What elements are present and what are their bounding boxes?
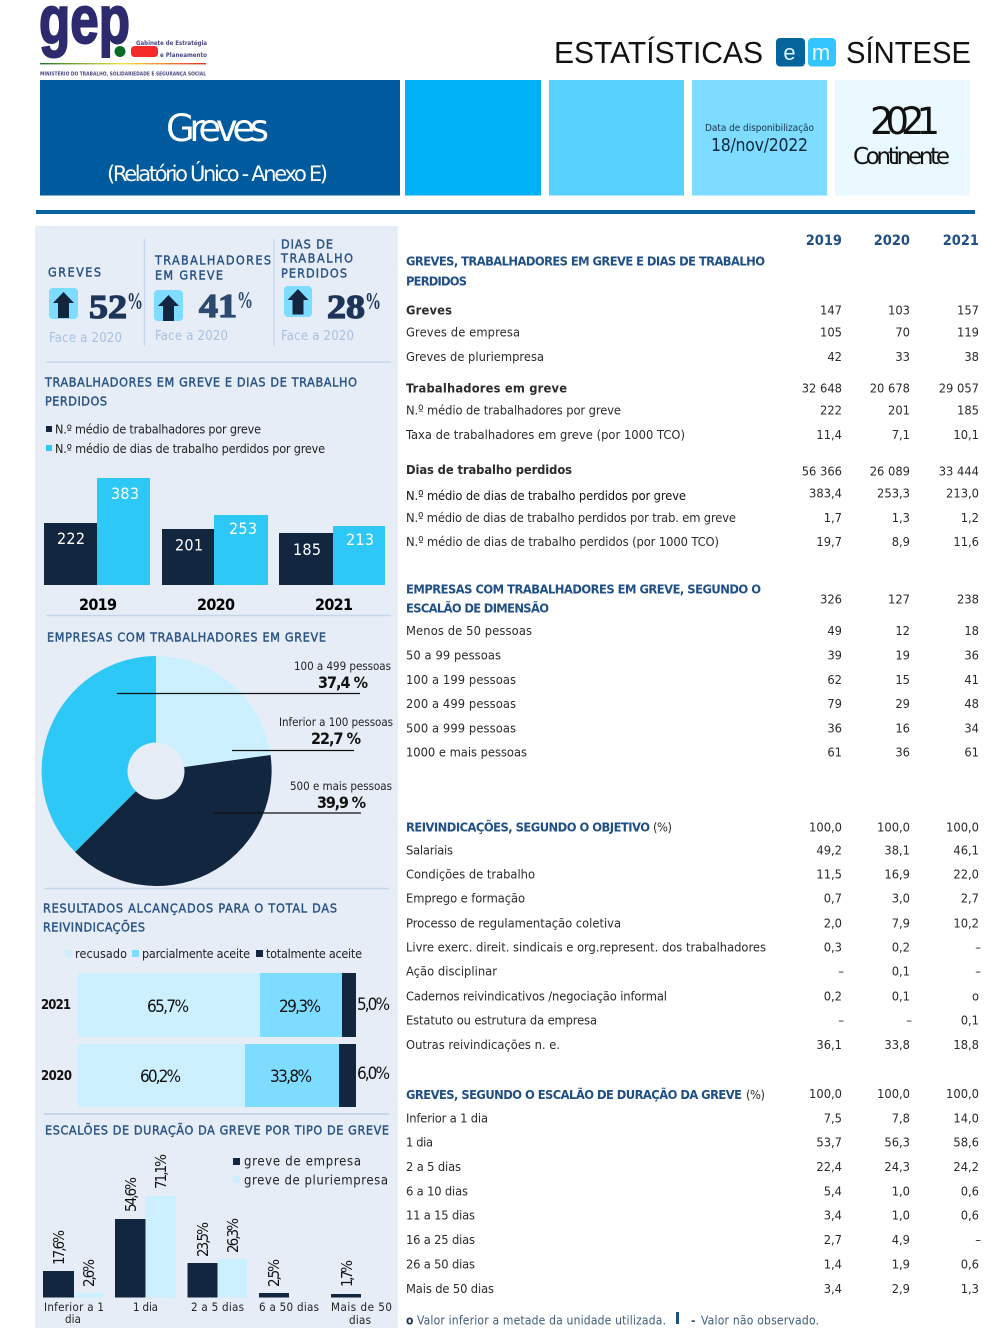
logo: GEP xyxy=(39,0,207,78)
table section: duração da greve: 3,4 xyxy=(824,1208,842,1224)
bar chart: trabalhadores e dias: 201 xyxy=(175,536,203,554)
row: dias de trabalho perdidos: 33 444 xyxy=(939,464,979,480)
table section: duração da greve: 2 a 5 dias xyxy=(406,1160,461,1175)
table section: duração da greve: 2,7 xyxy=(824,1233,842,1248)
publication title: m xyxy=(812,40,830,65)
section heading: GREVES, TRABALHADORES EM GREVE E DIAS DE TRABALHO xyxy=(406,254,765,270)
bar chart: duração por tipo: dia xyxy=(65,1312,81,1326)
table section: greves, trabalhadores e dias: 383,4 xyxy=(809,486,842,502)
table section: greves, trabalhadores e dias: 11,4 xyxy=(816,428,842,443)
table section: reivindicações: 16,9 xyxy=(884,868,910,882)
stacked bar: 2021: 5,0% xyxy=(357,995,390,1015)
bar chart: trabalhadores e dias: 222 xyxy=(57,529,85,548)
table section: greves, trabalhadores e dias: N.º médio de dias de trabalho perdidos (por 1000 TCO) xyxy=(406,535,719,550)
heading: resultados xyxy=(43,900,337,934)
stacked bar: 2021: 65,7% xyxy=(147,997,189,1017)
header block: availability date: Data de disponibilização xyxy=(705,123,814,134)
stacked bar: 2021 xyxy=(41,973,390,1037)
footnote: Valor não observado. xyxy=(701,1314,819,1328)
table section: duração da greve: 1 dia xyxy=(406,1136,433,1150)
KPI: dias de trabalho perdidos: % xyxy=(365,289,381,315)
table section: duração da greve: 0,6 xyxy=(961,1258,979,1272)
table section: duração da greve: 22,4 xyxy=(816,1160,842,1175)
table section: reivindicações: 33,8 xyxy=(884,1038,910,1053)
bar chart: duração por tipo: 26,3% xyxy=(224,1218,242,1253)
section heading: (%) xyxy=(746,1088,765,1103)
table section: reivindicações: – xyxy=(906,1014,912,1028)
table section: empresas por escalão de dimensão: 16 xyxy=(895,722,910,736)
row: trabalhadores em greve: Trabalhadores em greve xyxy=(406,382,567,396)
table section: duração da greve: 2,9 xyxy=(892,1282,910,1297)
table section: empresas por escalão de dimensão: 36 xyxy=(895,746,910,760)
pie chart: empresas por dimensão: 37,4 % xyxy=(318,673,368,692)
publication title: SÍNTESE xyxy=(846,35,971,70)
section heading xyxy=(406,1087,979,1103)
table section: reivindicações: 2,0 xyxy=(824,916,842,932)
publication title: ESTATÍSTICAS xyxy=(554,35,763,70)
table section: empresas por escalão de dimensão: Menos de 50 pessoas xyxy=(406,624,532,639)
table section: empresas por escalão de dimensão: 12 xyxy=(895,624,910,639)
section heading: 127 xyxy=(888,592,910,608)
table header: years xyxy=(806,233,979,249)
stacked bar: 2020: 2020 xyxy=(41,1069,72,1084)
bar chart: duração por tipo: 17,6% xyxy=(50,1230,68,1265)
pie chart: empresas por dimensão: 22,7 % xyxy=(311,729,361,748)
KPI: dias de trabalho perdidos: 28 xyxy=(327,289,365,326)
table section: duração da greve: 24,2 xyxy=(953,1160,979,1175)
table section: reivindicações: 0,2 xyxy=(824,990,842,1004)
table section: empresas por escalão de dimensão: 48 xyxy=(964,697,979,712)
KPI: greves: % xyxy=(127,289,143,315)
table section: greves, trabalhadores e dias: 1,7 xyxy=(824,511,842,526)
section heading xyxy=(406,820,979,836)
legend: resultados: recusado xyxy=(75,946,127,961)
table section: greves, trabalhadores e dias: 105 xyxy=(820,326,842,340)
table section: reivindicações: Cadernos reivindicativos /negociação informal xyxy=(406,990,667,1004)
bar chart: duração por tipo: 2,5% xyxy=(265,1259,283,1287)
table section: empresas por escalão de dimensão: 41 xyxy=(964,673,979,688)
table section: reivindicações: o xyxy=(972,990,979,1004)
section heading: 100,0 xyxy=(809,1087,842,1102)
KPI: greves xyxy=(48,264,143,346)
legend: tipo de greve xyxy=(233,1154,388,1188)
section heading: 100,0 xyxy=(877,1087,910,1102)
table section: reivindicações: Processo de regulamentação coletiva xyxy=(406,916,621,932)
table section: duração da greve: 16 a 25 dias xyxy=(406,1233,475,1248)
bar chart: trabalhadores e dias: 213 xyxy=(346,530,374,549)
bar chart: duração por tipo: dias xyxy=(349,1313,371,1327)
row: greves: 157 xyxy=(957,304,979,318)
stacked bar: 2021: 29,3% xyxy=(279,997,321,1017)
heading: trabalhadores e dias: TRABALHADORES EM GREVE E DIAS DE TRABALHO xyxy=(44,374,357,390)
legend: resultados: parcialmente aceite xyxy=(142,946,250,961)
section heading: 238 xyxy=(957,592,979,608)
publication title: e xyxy=(783,40,796,65)
logo: GEP: Gabinete de Estratégia xyxy=(136,39,207,47)
table section: greves, trabalhadores e dias: 42 xyxy=(827,350,842,365)
section heading xyxy=(406,254,765,290)
table section: duração da greve: 1,4 xyxy=(824,1258,842,1272)
table section: duração da greve: 1,9 xyxy=(892,1258,910,1272)
table section: reivindicações: – xyxy=(838,1014,844,1028)
KPI: dias de trabalho perdidos: DIAS DE xyxy=(281,236,333,252)
table section: duração da greve: 0,6 xyxy=(961,1208,979,1224)
table section: duração da greve: 3,4 xyxy=(824,1282,842,1297)
table section: greves, trabalhadores e dias: N.º médio de trabalhadores por greve xyxy=(406,404,621,418)
header block: year and region xyxy=(835,80,970,196)
table section: empresas por escalão de dimensão: 39 xyxy=(827,648,842,664)
pie chart: empresas por dimensão: 500 e mais pessoas xyxy=(290,779,392,793)
table section: greves, trabalhadores e dias: Taxa de trabalhadores em greve (por 1000 TCO) xyxy=(405,428,685,443)
table header: years: 2021 xyxy=(943,233,979,249)
bar chart: duração por tipo: 1,7% xyxy=(338,1260,356,1287)
table section: duração da greve: 11 a 15 dias xyxy=(406,1208,475,1224)
KPI: trabalhadores em greve: 41 xyxy=(199,288,237,325)
table section: reivindicações: 0,2 xyxy=(892,940,910,956)
table section: greves, trabalhadores e dias: 201 xyxy=(888,404,910,418)
section heading: 100,0 xyxy=(809,820,842,836)
table section: reivindicações: 7,9 xyxy=(892,916,910,932)
table section: reivindicações: 0,1 xyxy=(892,990,910,1004)
section heading: REIVINDICAÇÕES, SEGUNDO O OBJETIVO xyxy=(406,820,650,836)
footnote: - xyxy=(691,1314,695,1328)
table section: empresas por escalão de dimensão: 19 xyxy=(895,648,910,664)
pie chart: empresas por dimensão: 100 a 499 pessoas xyxy=(294,659,391,673)
table section: greves, trabalhadores e dias: 7,1 xyxy=(892,428,910,443)
table section: reivindicações: 22,0 xyxy=(953,868,979,882)
table section: reivindicações: 46,1 xyxy=(953,844,979,858)
stacked bar: 2020: 60,2% xyxy=(140,1067,181,1087)
header banner: Greves: (Relatório Único - Anexo E) xyxy=(107,161,328,186)
row: trabalhadores em greve: 29 057 xyxy=(939,382,979,396)
table section: empresas por escalão de dimensão: 79 xyxy=(827,697,842,712)
pie chart: empresas por dimensão: 39,9 % xyxy=(317,793,366,812)
table section: greves, trabalhadores e dias: N.º médio de dias de trabalho perdidos por trab. em greve xyxy=(406,511,736,526)
table header: years: 2019 xyxy=(806,233,842,249)
table section: duração da greve xyxy=(406,1087,981,1297)
section heading: 100,0 xyxy=(946,1087,979,1102)
bar chart: duração por tipo: 6 a 50 dias xyxy=(259,1300,319,1314)
table section: empresas por escalão de dimensão: 18 xyxy=(964,624,979,639)
bar chart: duração por tipo xyxy=(43,1154,392,1327)
table section: duração da greve: 4,9 xyxy=(892,1233,910,1248)
bar chart: duração por tipo: 2 a 5 dias xyxy=(191,1300,244,1314)
table section: duração da greve: 6 a 10 dias xyxy=(406,1184,468,1200)
legend: resultados: totalmente aceite xyxy=(266,946,362,961)
row: trabalhadores em greve xyxy=(406,382,979,396)
legend: bar chart xyxy=(46,422,325,456)
footnote: o xyxy=(406,1314,413,1328)
legend: bar chart: N.º médio de dias de trabalho perdidos por greve xyxy=(55,441,325,456)
bar chart: duração por tipo: 71,1% xyxy=(152,1154,170,1189)
table section: duração da greve: 53,7 xyxy=(816,1136,842,1150)
stacked bar: 2021: 2021 xyxy=(41,998,71,1013)
row: dias de trabalho perdidos: 26 089 xyxy=(870,464,910,480)
table section: empresas por escalão de dimensão: 36 xyxy=(964,648,979,664)
table section: reivindicações: 0,7 xyxy=(824,892,842,906)
header block: bright blue xyxy=(405,80,541,196)
legend: tipo de greve: greve de empresa xyxy=(244,1154,361,1170)
heading: resultados: REIVINDICAÇÕES xyxy=(43,920,145,934)
table section: reivindicações xyxy=(406,820,981,1053)
row: trabalhadores em greve: 20 678 xyxy=(870,382,910,396)
table section: empresas por escalão de dimensão: 36 xyxy=(827,722,842,736)
table section: empresas por escalão de dimensão: 1000 e mais pessoas xyxy=(406,746,527,760)
header block: availability date: 18/nov/2022 xyxy=(711,136,808,156)
legend: tipo de greve: greve de pluriempresa xyxy=(244,1174,388,1188)
legend: resultados xyxy=(65,946,362,961)
logo: GEP: MINISTÉRIO DO TRABALHO, SOLIDARIEDADE E SEGURANÇA SOCIAL xyxy=(40,70,207,78)
table section: reivindicações: – xyxy=(975,940,981,956)
table section: reivindicações: 0,3 xyxy=(824,940,842,956)
table section: reivindicações: Livre exerc. direit. sindicais e org.represent. dos trabalhadores xyxy=(406,940,766,956)
section heading: 100,0 xyxy=(946,820,979,836)
header block: year and region: 2021 xyxy=(870,100,940,143)
table section: greves, trabalhadores e dias: 253,3 xyxy=(877,486,910,502)
table section: reivindicações: 2,7 xyxy=(961,892,979,906)
table section: duração da greve: 14,0 xyxy=(953,1112,979,1126)
footnote: Valor inferior a metade da unidade utilizada. xyxy=(417,1314,666,1328)
heading: resultados: RESULTADOS ALCANÇADOS PARA O TOTAL DAS xyxy=(43,900,337,916)
table section: duração da greve: 26 a 50 dias xyxy=(406,1258,475,1272)
bar chart: duração por tipo: 54,6% xyxy=(122,1177,140,1212)
footnote xyxy=(406,1312,819,1328)
heading: trabalhadores e dias: PERDIDOS xyxy=(45,394,107,408)
table section: greves, trabalhadores e dias: 213,0 xyxy=(946,486,979,502)
row: greves: Greves xyxy=(406,304,452,318)
bar chart: trabalhadores e dias: 2020 xyxy=(197,595,235,614)
table section: duração da greve: 1,0 xyxy=(892,1184,910,1200)
table section: duração da greve: 5,4 xyxy=(824,1184,842,1200)
KPI: trabalhadores em greve: % xyxy=(237,288,253,314)
table section: duração da greve: 24,3 xyxy=(884,1160,910,1175)
table section: empresas por escalão de dimensão: 49 xyxy=(827,624,842,639)
table header: years: 2020 xyxy=(874,233,910,249)
table section: reivindicações: 10,2 xyxy=(953,916,979,932)
table section: greves, trabalhadores e dias: 119 xyxy=(957,326,979,340)
table section: empresas por escalão de dimensão: 50 a 99 pessoas xyxy=(406,648,501,664)
stacked bar: 2020 xyxy=(41,1044,390,1107)
table section: greves, trabalhadores e dias: 222 xyxy=(820,404,842,418)
table section: empresas por escalão de dimensão: 61 xyxy=(964,746,979,760)
pie chart: empresas por dimensão: Inferior a 100 pessoas xyxy=(279,715,393,729)
publication title xyxy=(554,35,971,70)
section heading: (%) xyxy=(653,820,672,836)
bar chart: trabalhadores e dias: 2019 xyxy=(79,595,117,614)
KPI: dias de trabalho perdidos: PERDIDOS xyxy=(281,266,347,280)
row: trabalhadores em greve: 32 648 xyxy=(802,382,842,396)
header block: year and region: Continente xyxy=(853,144,950,170)
table section: duração da greve: 0,6 xyxy=(961,1184,979,1200)
table section: empresas por escalão de dimensão: 61 xyxy=(827,746,842,760)
stacked bar: 2020: 33,8% xyxy=(270,1067,312,1087)
table section: duração da greve: Mais de 50 dias xyxy=(406,1282,494,1297)
table section: greves, trabalhadores e dias: Greves de pluriempresa xyxy=(406,350,544,365)
header banner: Greves: Greves xyxy=(166,107,269,150)
table section: greves, trabalhadores e dias: N.º médio de dias de trabalho perdidos por greve xyxy=(406,489,686,504)
table section: reivindicações: 0,1 xyxy=(961,1014,979,1028)
table section: reivindicações: 38,1 xyxy=(884,844,910,858)
table section: reivindicações: 3,0 xyxy=(892,892,910,906)
table section: empresas por escalão de dimensão xyxy=(406,582,979,760)
legend: bar chart: N.º médio de trabalhadores por greve xyxy=(55,422,261,436)
KPI: trabalhadores em greve xyxy=(154,252,271,344)
row: greves: 103 xyxy=(888,304,910,318)
stacked bar: 2020: 6,0% xyxy=(357,1064,390,1084)
row: dias de trabalho perdidos xyxy=(406,463,979,480)
bar chart: duração por tipo: 2,6% xyxy=(80,1259,98,1287)
KPI: greves: Face a 2020 xyxy=(49,331,122,346)
bar chart: trabalhadores e dias: 253 xyxy=(229,519,257,538)
pie chart: empresas por dimensão xyxy=(42,656,393,886)
table section: empresas por escalão de dimensão: 15 xyxy=(895,673,910,688)
table section: reivindicações: Estatuto ou estrutura da empresa xyxy=(406,1014,597,1028)
table section: duração da greve: 7,8 xyxy=(892,1112,910,1126)
KPI: trabalhadores em greve: EM GREVE xyxy=(155,268,223,282)
table section: empresas por escalão de dimensão: 29 xyxy=(895,697,910,712)
table section: empresas por escalão de dimensão: 100 a 199 pessoas xyxy=(406,673,516,688)
KPI: dias de trabalho perdidos: TRABALHO xyxy=(280,250,353,266)
section heading: 100,0 xyxy=(877,820,910,836)
bar chart: trabalhadores e dias xyxy=(44,478,385,614)
table section: duração da greve: 56,3 xyxy=(884,1136,910,1150)
KPI: trabalhadores em greve: Face a 2020 xyxy=(155,329,228,344)
logo: GEP: e Planeamento xyxy=(160,51,207,59)
table section: duração da greve: Inferior a 1 dia xyxy=(406,1112,488,1126)
bar chart: trabalhadores e dias: 185 xyxy=(293,540,321,559)
KPI: greves: GREVES xyxy=(48,264,101,280)
table section: empresas por escalão de dimensão: 500 a 999 pessoas xyxy=(406,722,516,736)
bar chart: trabalhadores e dias: 383 xyxy=(111,484,139,503)
table section: greves, trabalhadores e dias: 1,3 xyxy=(892,511,910,526)
table section: greves, trabalhadores e dias: 185 xyxy=(957,404,979,418)
table section: greves, trabalhadores e dias: 10,1 xyxy=(953,428,979,443)
table section: duração da greve: 1,0 xyxy=(892,1208,910,1224)
section heading: EMPRESAS COM TRABALHADORES EM GREVE, SEGUNDO O xyxy=(406,582,761,598)
table section: duração da greve: 1,3 xyxy=(961,1282,979,1297)
bar chart: duração por tipo: 23,5% xyxy=(194,1222,212,1257)
section heading: GREVES, SEGUNDO O ESCALÃO DE DURAÇÃO DA GREVE xyxy=(406,1087,742,1103)
table section: greves, trabalhadores e dias: Greves de empresa xyxy=(406,326,520,340)
table section: reivindicações: Ação disciplinar xyxy=(406,964,497,980)
heading: trabalhadores e dias xyxy=(44,374,357,408)
row: greves xyxy=(406,304,979,318)
table section: greves, trabalhadores e dias: 33 xyxy=(895,350,910,365)
table section: greves, trabalhadores e dias: 38 xyxy=(964,350,979,365)
bar chart: trabalhadores e dias: 2021 xyxy=(315,595,353,614)
row: greves: 147 xyxy=(820,304,842,318)
bar chart: duração por tipo: Mais de 50 xyxy=(331,1300,392,1314)
table section: reivindicações: 36,1 xyxy=(816,1038,842,1053)
table section: reivindicações: – xyxy=(975,964,981,980)
header block: light blue xyxy=(549,80,684,196)
row: dias de trabalho perdidos: 56 366 xyxy=(802,464,842,480)
section heading: PERDIDOS xyxy=(406,274,467,290)
heading: empresas: EMPRESAS COM TRABALHADORES EM GREVE xyxy=(47,630,326,644)
heading: escalões de duração: ESCALÕES DE DURAÇÃO DA GREVE POR TIPO DE GREVE xyxy=(45,1122,389,1138)
KPI: dias de trabalho perdidos: Face a 2020 xyxy=(281,329,354,344)
section heading: ESCALÃO DE DIMENSÃO xyxy=(406,600,549,616)
table section: greves, trabalhadores e dias xyxy=(405,254,979,550)
bar chart: duração por tipo: Inferior a 1 xyxy=(44,1300,104,1314)
table section: reivindicações: 18,8 xyxy=(953,1038,979,1053)
table section: greves, trabalhadores e dias: 1,2 xyxy=(961,511,979,526)
section heading: 326 xyxy=(820,592,842,608)
header banner: Greves xyxy=(40,80,400,196)
bar chart: duração por tipo: 1 dia xyxy=(133,1300,158,1314)
table section: reivindicações: – xyxy=(838,964,844,980)
table section: greves, trabalhadores e dias: 19,7 xyxy=(816,535,842,550)
table section: empresas por escalão de dimensão: 200 a 499 pessoas xyxy=(406,697,516,712)
KPI: dias de trabalho perdidos xyxy=(280,236,381,344)
table section: greves, trabalhadores e dias: 11,6 xyxy=(953,535,979,550)
table section: reivindicações: Condições de trabalho xyxy=(406,868,535,882)
KPI: greves: 52 xyxy=(89,289,127,326)
section heading xyxy=(406,582,979,616)
header block: availability date xyxy=(692,80,827,196)
table section: reivindicações: Outras reivindicações n. e. xyxy=(406,1038,560,1053)
table section: reivindicações: Emprego e formação xyxy=(406,892,525,906)
table section: duração da greve: – xyxy=(975,1233,981,1248)
table section: reivindicações: 11,5 xyxy=(816,868,842,882)
row: dias de trabalho perdidos: Dias de trabalho perdidos xyxy=(406,463,572,478)
table section: greves, trabalhadores e dias: 8,9 xyxy=(892,535,910,550)
table section: duração da greve: 7,5 xyxy=(824,1112,842,1126)
panel: left summary xyxy=(35,226,398,1328)
table section: empresas por escalão de dimensão: 34 xyxy=(964,722,979,736)
table section: reivindicações: Salariais xyxy=(406,844,453,858)
KPI: trabalhadores em greve: TRABALHADORES xyxy=(154,252,271,268)
table section: empresas por escalão de dimensão: 62 xyxy=(827,673,842,688)
table section: duração da greve: 58,6 xyxy=(953,1136,979,1150)
table section: reivindicações: 49,2 xyxy=(816,844,842,858)
table section: greves, trabalhadores e dias: 70 xyxy=(895,326,910,340)
table section: reivindicações: 0,1 xyxy=(892,964,910,980)
